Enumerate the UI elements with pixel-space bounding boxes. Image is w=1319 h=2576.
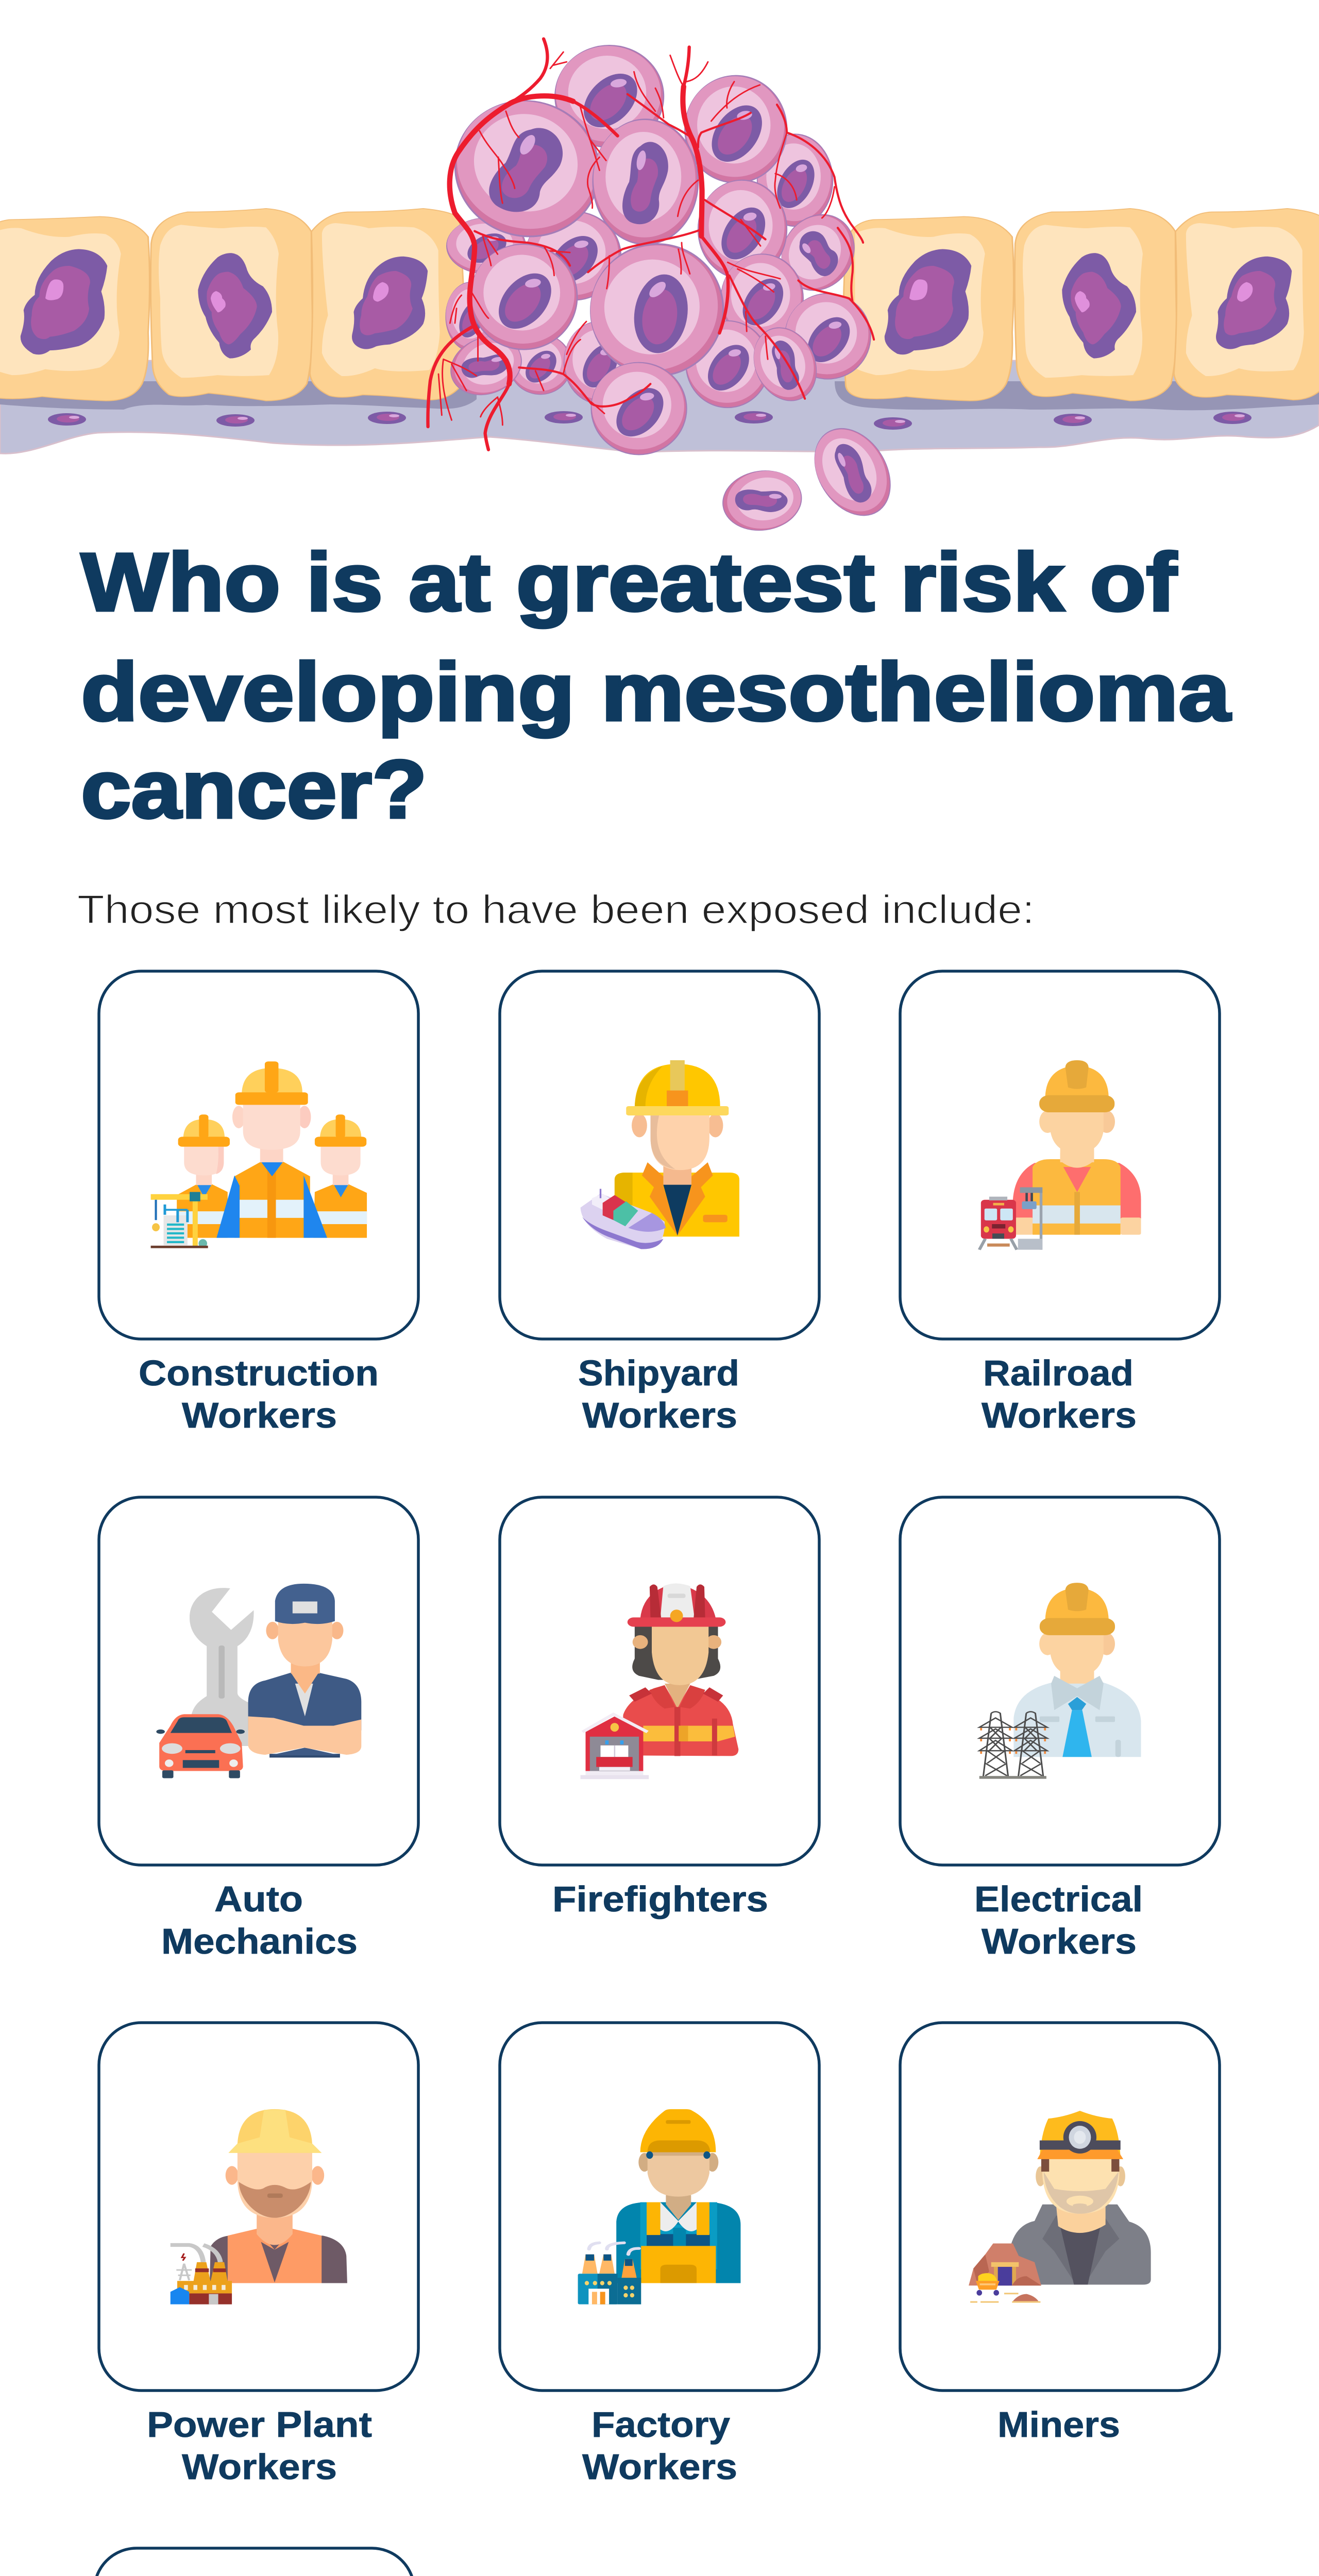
label: Workers xyxy=(982,1395,1137,1435)
band shadow, right xyxy=(835,381,1319,410)
label: Miners xyxy=(997,2404,1120,2445)
panel: railroad workers xyxy=(900,971,1220,1435)
panel: firefighters xyxy=(500,1497,819,1919)
label xyxy=(139,1353,379,1435)
title: Who is at greatest risk of xyxy=(81,536,1177,628)
card outline xyxy=(99,1497,418,1865)
panel: shipyard workers xyxy=(500,971,819,1435)
label: Power Plant xyxy=(147,2404,372,2445)
label: Factory xyxy=(591,2404,730,2445)
yellow cells, left xyxy=(0,209,466,401)
label: Workers xyxy=(582,2447,737,2487)
panel: miners xyxy=(900,2023,1220,2445)
panel: insulation installers xyxy=(94,2548,414,2576)
drifting tumor cell, right xyxy=(799,415,906,529)
icon: auto mechanic xyxy=(156,1584,361,1778)
yellow cells, right xyxy=(843,209,1319,401)
label: Auto xyxy=(214,1879,303,1919)
icon: factory worker xyxy=(578,2109,740,2304)
card outline xyxy=(900,2023,1220,2391)
label xyxy=(147,2404,372,2487)
icon: firefighter xyxy=(581,1583,738,1779)
label: Railroad xyxy=(983,1353,1134,1393)
label: Workers xyxy=(182,1395,337,1435)
card outline xyxy=(500,2023,819,2391)
card outline xyxy=(500,971,819,1339)
panel: factory workers xyxy=(500,2023,819,2487)
title: developing mesothelioma xyxy=(81,646,1231,738)
label xyxy=(578,1353,739,1435)
label: Workers xyxy=(982,1921,1137,1961)
label: Firefighters xyxy=(552,1879,768,1919)
band shadow, left xyxy=(0,381,477,410)
icon: power plant worker xyxy=(171,2109,347,2304)
icon: electrical worker xyxy=(979,1583,1141,1779)
label: Construction xyxy=(139,1353,379,1393)
basement membrane band xyxy=(0,361,1319,453)
card outline xyxy=(900,971,1220,1339)
label: Electrical xyxy=(974,1879,1143,1919)
label xyxy=(982,1353,1137,1435)
panel: electrical workers xyxy=(900,1497,1220,1961)
title: cancer? xyxy=(81,743,427,835)
label xyxy=(974,1879,1143,1961)
small nuclei in band xyxy=(48,411,1252,430)
label: Shipyard xyxy=(578,1353,739,1393)
label: Mechanics xyxy=(161,1921,358,1961)
title xyxy=(81,536,1231,835)
card outline xyxy=(94,2548,414,2576)
label: Workers xyxy=(582,1395,737,1435)
icon: miner xyxy=(969,2111,1151,2303)
card outline xyxy=(500,1497,819,1865)
panel: auto mechanics xyxy=(99,1497,418,1961)
label xyxy=(161,1879,358,1961)
panel: construction workers xyxy=(99,971,418,1435)
drifting tumor cell, left xyxy=(719,466,805,535)
tumor cell cluster xyxy=(440,45,871,454)
icon: shipyard worker xyxy=(581,1060,739,1249)
illustration: tumor growing through mesothelial cell layer xyxy=(0,39,1319,535)
card outline xyxy=(99,971,418,1339)
card outline xyxy=(900,1497,1220,1865)
label: Workers xyxy=(182,2447,337,2487)
icon: railroad worker xyxy=(979,1060,1141,1250)
subtitle: Those most likely to have been exposed include: xyxy=(77,887,1035,932)
icon: construction workers xyxy=(151,1061,367,1248)
card outline xyxy=(99,2023,418,2391)
panel: power plant workers xyxy=(99,2023,418,2487)
label xyxy=(582,2404,737,2487)
blood vessels xyxy=(428,39,874,450)
